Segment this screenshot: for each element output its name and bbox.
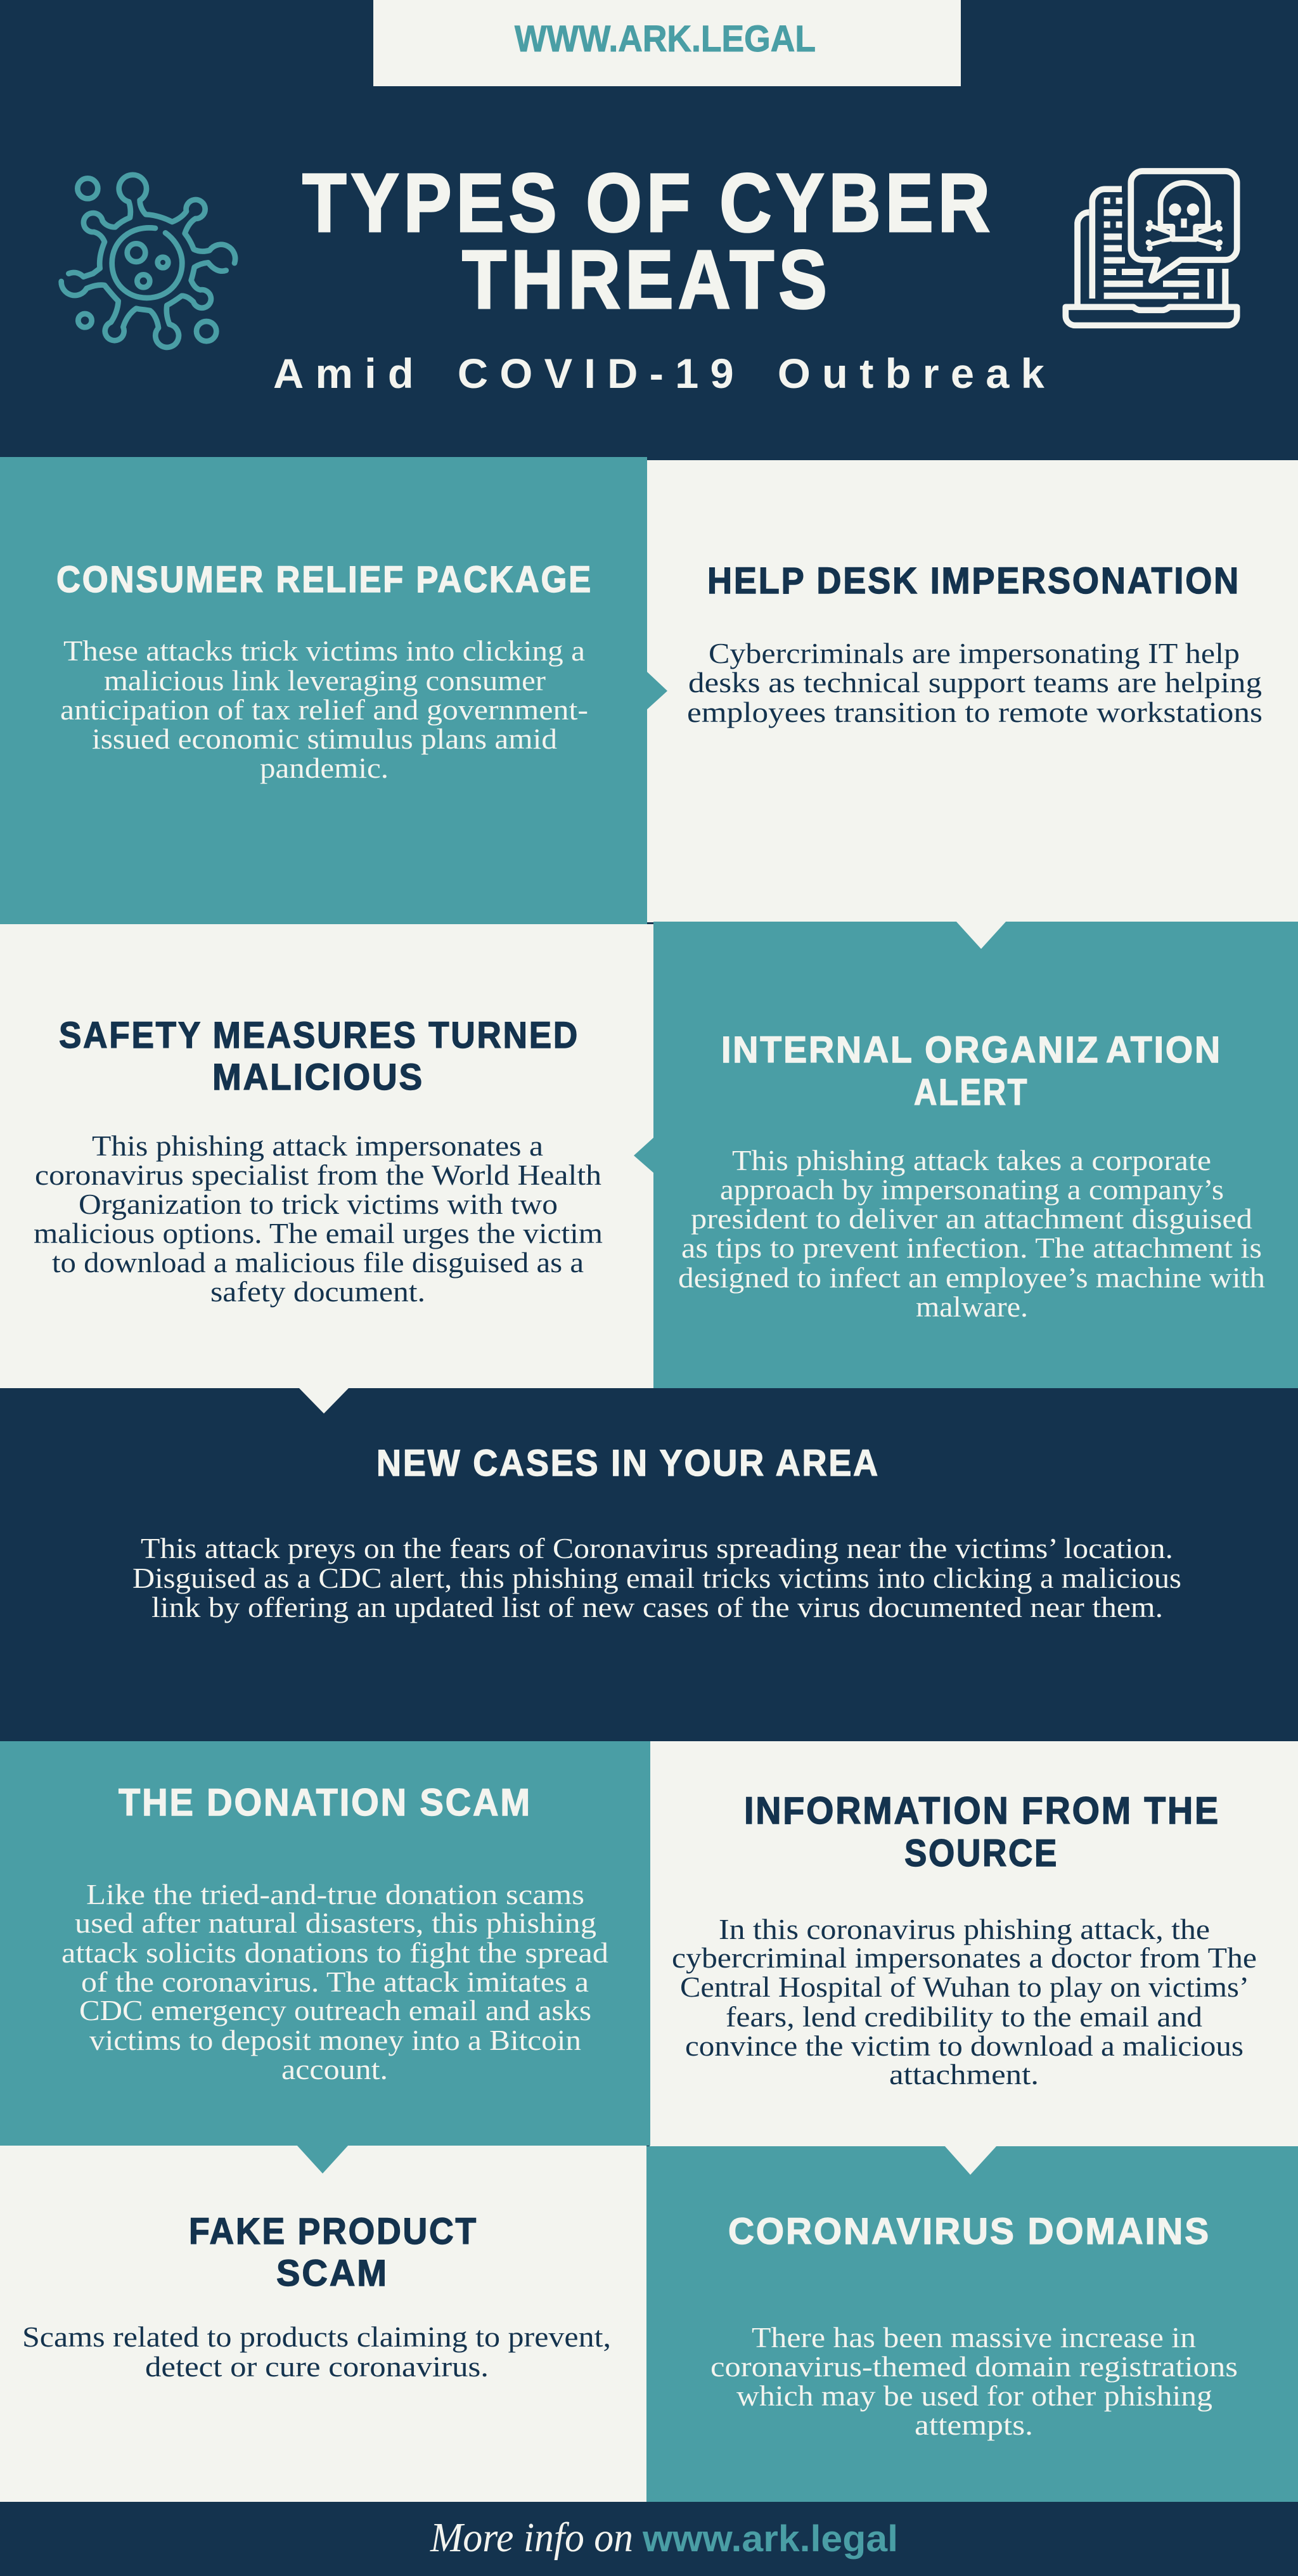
arrow: donation scam down to fake product bbox=[297, 2145, 349, 2174]
text: coronavirus domains description bbox=[710, 2321, 1238, 2441]
heading: fake product scam: FAKE PRODUCT bbox=[189, 2211, 478, 2252]
text: consumer relief description: malicious link leveraging consumer bbox=[104, 664, 546, 697]
arrow: information source down to coronavirus domains bbox=[944, 2146, 997, 2175]
panel: help desk impersonation bbox=[647, 460, 1298, 922]
text: help desk description: Cybercriminals are impersonating IT help bbox=[709, 637, 1240, 669]
text: safety measures description: safety document. bbox=[210, 1275, 425, 1308]
heading: safety measures turned malicious: SAFETY MEASURES TURNED bbox=[59, 1015, 579, 1056]
text: coronavirus domains description: attempts. bbox=[915, 2409, 1033, 2441]
text: internal organization description: designed to infect an employee’s machine with bbox=[678, 1261, 1265, 1294]
heading: information from the source: INFORMATION FROM THE bbox=[744, 1789, 1220, 1832]
text: donation scam description: of the coronavirus. The attack imitates a bbox=[81, 1966, 589, 1998]
heading: consumer relief package: CONSUMER RELIEF PACKAGE bbox=[56, 559, 593, 600]
text: information source description: cybercriminal impersonates a doctor from The bbox=[672, 1942, 1257, 1974]
text: internal organization description: malware. bbox=[916, 1291, 1028, 1323]
text: coronavirus domains description: coronavirus-themed domain registrations bbox=[710, 2350, 1238, 2383]
arrow: consumer relief to help desk bbox=[646, 671, 667, 710]
text: safety measures description bbox=[34, 1130, 603, 1308]
text: donation scam description bbox=[61, 1878, 608, 2085]
text: information source description: fears, lend credibility to the email and bbox=[726, 2000, 1202, 2033]
heading: fake product scam bbox=[189, 2211, 478, 2294]
panel: information from the source bbox=[650, 1741, 1298, 2147]
title: THREATS bbox=[462, 233, 832, 326]
heading: safety measures turned malicious: MALICIOUS bbox=[212, 1057, 424, 1098]
text: internal organization description: president to deliver an attachment disguised bbox=[691, 1202, 1252, 1235]
text: new cases description: This attack preys on the fears of Coronavirus spreading near the victims’ location. bbox=[141, 1532, 1173, 1564]
heading: coronavirus domains: CORONAVIRUS DOMAINS bbox=[728, 2211, 1211, 2252]
icon: virus bbox=[61, 175, 235, 347]
text: consumer relief description: These attacks trick victims into clicking a bbox=[63, 634, 585, 667]
heading: new cases in your area: NEW CASES IN YOUR AREA bbox=[376, 1443, 880, 1484]
text: coronavirus domains description: There has been massive increase in bbox=[752, 2321, 1196, 2354]
text: help desk description: employees transition to remote workstations bbox=[687, 696, 1263, 728]
heading: internal organization alert: ALERT bbox=[914, 1072, 1029, 1113]
arrow: safety measures down to new cases bbox=[299, 1388, 349, 1414]
text: internal organization description: This phishing attack takes a corporate bbox=[732, 1144, 1211, 1176]
title: TYPES OF CYBER bbox=[302, 156, 994, 249]
heading: information from the source: SOURCE bbox=[904, 1832, 1058, 1874]
panel: new cases in your area bbox=[0, 1388, 1298, 1742]
panel: header bbox=[0, 0, 1298, 463]
heading: fake product scam: SCAM bbox=[276, 2253, 389, 2294]
heading: safety measures turned malicious bbox=[59, 1015, 579, 1098]
text: fake product description bbox=[22, 2321, 611, 2383]
text: new cases description bbox=[132, 1532, 1181, 1623]
text: donation scam description: account. bbox=[281, 2053, 388, 2085]
panel: fake product scam bbox=[0, 2146, 646, 2502]
footer bbox=[0, 2502, 1298, 2576]
text: safety measures description: to download a malicious file disguised as a bbox=[52, 1246, 584, 1278]
text: consumer relief description bbox=[60, 634, 588, 784]
footer text: more info: More info on bbox=[430, 2515, 633, 2561]
subtitle: Amid COVID-19 Outbreak bbox=[273, 350, 1056, 397]
website banner bbox=[373, 0, 961, 86]
text: information source description: In this coronavirus phishing attack, the bbox=[719, 1913, 1210, 1945]
text: donation scam description: Like the tried-and-true donation scams bbox=[86, 1878, 584, 1910]
text: donation scam description: attack solicits donations to fight the spread bbox=[61, 1936, 608, 1969]
text: fake product description: Scams related to products claiming to prevent, bbox=[22, 2321, 611, 2353]
text: information source description: attachment. bbox=[889, 2058, 1039, 2090]
text: safety measures description: malicious options. The email urges the victim bbox=[34, 1217, 603, 1249]
text: internal organization description: as tips to prevent infection. The attachment is bbox=[681, 1232, 1262, 1264]
heading: help desk impersonation: HELP DESK IMPERSONATION bbox=[707, 560, 1240, 602]
text: help desk description: desks as technical support teams are helping bbox=[688, 666, 1262, 699]
footer link: website: www.ark.legal bbox=[642, 2518, 898, 2560]
text: help desk description bbox=[687, 637, 1263, 728]
text: donation scam description: CDC emergency outreach email and asks bbox=[79, 1994, 591, 2026]
panel: consumer relief package bbox=[0, 457, 647, 924]
icon: laptop with skull message bbox=[1065, 171, 1237, 325]
heading: internal organization alert: INTERNAL ORGANIZATION bbox=[721, 1029, 1222, 1071]
text: coronavirus domains description: which may be used for other phishing bbox=[736, 2380, 1212, 2412]
text: internal organization description: approach by impersonating a company’s bbox=[720, 1173, 1224, 1206]
heading: the donation scam: THE DONATION SCAM bbox=[119, 1781, 532, 1824]
text: safety measures description: This phishing attack impersonates a bbox=[92, 1130, 543, 1162]
text: information source description: Central Hospital of Wuhan to play on victims’ bbox=[680, 1971, 1249, 2003]
text: donation scam description: used after natural disasters, this phishing bbox=[75, 1907, 596, 1939]
text: information source description bbox=[672, 1913, 1257, 2090]
website banner: WWW.ARK.LEGAL bbox=[515, 18, 816, 60]
panel: safety measures turned malicious bbox=[0, 924, 653, 1388]
text: internal organization description bbox=[678, 1144, 1265, 1323]
text: information source description: convince the victim to download a malicious bbox=[685, 2030, 1243, 2062]
text: consumer relief description: pandemic. bbox=[260, 752, 389, 784]
text: safety measures description: coronavirus specialist from the World Health bbox=[35, 1159, 601, 1191]
title bbox=[302, 156, 994, 326]
text: new cases description: link by offering an updated list of new cases of the virus documented near them. bbox=[151, 1591, 1163, 1623]
panel: coronavirus domains bbox=[646, 2146, 1298, 2502]
text: new cases description: Disguised as a CDC alert, this phishing email tricks victims into clicking a malicious bbox=[132, 1562, 1181, 1594]
text: consumer relief description: anticipation of tax relief and government- bbox=[60, 693, 588, 726]
panel: internal organization alert bbox=[653, 922, 1298, 1389]
text: consumer relief description: issued economic stimulus plans amid bbox=[92, 723, 557, 755]
arrow: internal alert to safety measures bbox=[634, 1137, 654, 1173]
text: donation scam description: victims to deposit money into a Bitcoin bbox=[89, 2024, 581, 2056]
text: fake product description: detect or cure coronavirus. bbox=[145, 2350, 489, 2383]
panel: the donation scam bbox=[0, 1741, 650, 2146]
arrow: help desk down to internal alert bbox=[956, 921, 1006, 949]
heading: information from the source bbox=[744, 1789, 1220, 1874]
heading: internal organization alert bbox=[721, 1029, 1222, 1113]
text: safety measures description: Organization to trick victims with two bbox=[79, 1188, 558, 1220]
